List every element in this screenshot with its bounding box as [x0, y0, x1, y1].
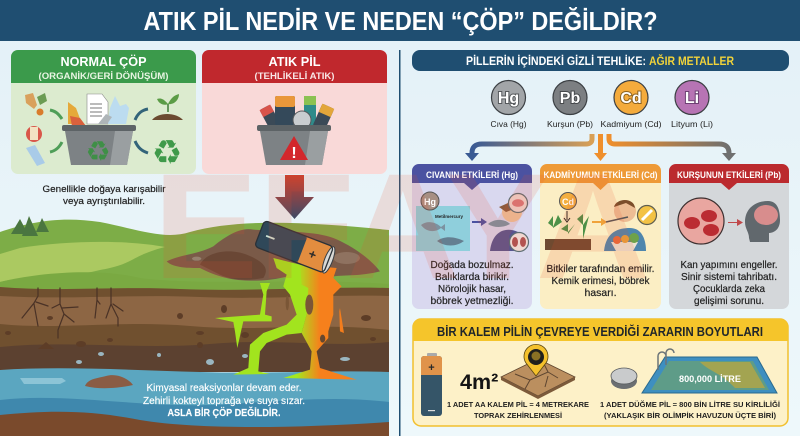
river bed	[0, 412, 389, 436]
caption: soil poisoning	[447, 400, 589, 420]
panel: waste battery	[202, 50, 387, 174]
green stream	[233, 258, 308, 375]
heading: cadmium: KADMİYUMUN ETKİLERİ (Cd)	[544, 170, 658, 181]
illustration: mercury in fish to human: Metilmercury	[435, 214, 464, 219]
banner: hidden danger: AĞIR METALLER	[649, 53, 734, 68]
element: cadmium: Kadmiyum (Cd)	[600, 119, 662, 129]
element: cadmium: Cd	[620, 90, 642, 107]
element: mercury	[490, 80, 527, 129]
panel: lead effects	[669, 164, 789, 309]
text: lead: Çocuklarda zeka	[693, 283, 765, 295]
side drip	[215, 283, 272, 348]
icon: skull pin	[524, 344, 548, 376]
trees	[11, 216, 49, 236]
title banner	[0, 0, 800, 41]
scene caption: Kimyasal reaksiyonlar devam eder.	[146, 383, 302, 394]
heading: damage scale: BİR KALEM PİLİN ÇEVREYE VERDİĞİ ZARARIN BOYUTLARI	[437, 324, 763, 339]
icon: AA battery	[421, 353, 442, 416]
waste battery heading: ATIK PİL	[268, 54, 321, 69]
element: lead	[547, 80, 593, 129]
illustration: mercury in fish to human: Hg	[424, 197, 436, 207]
orange stream	[283, 265, 357, 380]
bin with warning sign	[257, 125, 331, 165]
icon: polluted pool	[642, 349, 777, 393]
text: lead	[680, 259, 778, 307]
toxic leak: green and orange	[215, 258, 357, 380]
waste items	[25, 93, 129, 166]
element: lithium: Lityum (Li)	[671, 119, 713, 129]
text: cadmium: hasarı.	[584, 287, 616, 299]
soil mound	[167, 229, 380, 281]
panel: normal waste	[11, 50, 196, 174]
caption: normal waste	[42, 184, 166, 207]
watermark: EFAYA	[153, 142, 650, 310]
heading: lead: KURŞUNUN ETKİLERİ (Pb)	[677, 170, 781, 181]
element: mercury: Hg	[498, 90, 519, 107]
leaking battery: +	[306, 246, 319, 263]
bin with recycle symbol: ♻	[85, 136, 111, 167]
scene caption: ASLA BİR ÇÖP DEĞİLDİR.	[168, 406, 281, 419]
icon: button cell	[611, 368, 637, 389]
element: mercury: Cıva (Hg)	[490, 119, 527, 129]
text: cadmium: Kemik erimesi, böbrek	[552, 275, 650, 287]
banner: hidden danger	[412, 50, 789, 71]
panel: cadmium effects	[540, 164, 661, 309]
icon: cracked soil tile	[501, 359, 575, 399]
orange drip	[339, 308, 344, 333]
illustration: cadmium in plants to human	[545, 192, 656, 251]
caption: water pollution: (YAKLAŞIK BİR OLİMPİK HAVUZUN ÜÇTE BİRİ)	[604, 411, 777, 420]
sprout on soil	[152, 94, 183, 120]
text: mercury: böbrek yetmezliği.	[430, 295, 514, 307]
scene caption	[143, 383, 305, 419]
text: cadmium	[546, 263, 654, 299]
text: mercury	[430, 259, 514, 307]
text: lead: Sinir sistemi tahribatı.	[681, 271, 777, 283]
hills	[0, 220, 389, 292]
panel: landscape cross-section	[0, 216, 389, 436]
illustration: cadmium in plants to human: Cd	[562, 197, 574, 207]
soil layers	[0, 287, 389, 372]
recycling symbol: ♻	[152, 134, 182, 172]
text: mercury: Balıklarda birikir.	[435, 271, 509, 283]
illustration: blood cells to brain	[678, 198, 780, 244]
flow arrows	[50, 110, 62, 152]
illustration: mercury in fish to human	[416, 192, 528, 252]
water	[0, 368, 389, 436]
element icons	[490, 80, 713, 129]
scene caption: Zehirli kokteyl toprağa ve suya sızar.	[143, 396, 305, 407]
panel: normal waste: (ORGANİK/GERİ DÖNÜŞÜM)	[38, 71, 168, 82]
element: lithium	[671, 80, 713, 129]
panel: mercury effects	[412, 164, 532, 309]
heading: mercury: CIVANIN ETKİLERİ (Hg)	[426, 170, 518, 181]
text: mercury: Doğada bozulmaz.	[430, 259, 514, 271]
caption: normal waste: veya ayrıştırılabilir.	[63, 196, 145, 207]
tree roots	[22, 288, 123, 338]
arrows: metals to effects	[465, 134, 736, 161]
caption: soil poisoning: 1 ADET AA KALEM PİL = 4 METREKARE	[447, 400, 589, 409]
icon: polluted pool: 800,000 LİTRE	[679, 374, 741, 385]
bin with recycle symbol	[62, 125, 136, 167]
caption: water pollution: 1 ADET DÜĞME PİL = 800 BİN LİTRE SU KİRLİLİĞİ	[600, 400, 780, 409]
banner: hidden danger: PİLLERİN İÇİNDEKİ GİZLİ TEHLİKE:	[466, 53, 646, 68]
icon: AA battery: +	[428, 362, 435, 374]
caption: soil poisoning: TOPRAK ZEHİRLENMESİ	[474, 411, 562, 420]
caption: normal waste: Genellikle doğaya karışabilir	[42, 184, 166, 195]
panel: waste battery: (TEHLİKELİ ATIK)	[254, 71, 334, 82]
text: lead: gelişimi sorunu.	[694, 295, 764, 307]
bin with warning sign: !	[291, 145, 297, 162]
river rocks	[85, 375, 133, 388]
element: lead: Pb	[560, 90, 580, 107]
element: cadmium	[600, 80, 662, 129]
normal waste heading: NORMAL ÇÖP	[60, 54, 147, 69]
arrow: battery to ground	[275, 175, 314, 219]
batteries	[260, 96, 334, 131]
panel: damage scale	[413, 319, 788, 426]
vertical divider	[399, 50, 400, 436]
leaking battery	[255, 220, 337, 274]
caption: water pollution	[600, 400, 780, 420]
element: lithium: Li	[685, 90, 699, 107]
scattered stones	[5, 305, 376, 349]
text: lead: Kan yapımını engeller.	[680, 259, 778, 271]
text: mercury: Nörolojik hasar,	[438, 283, 506, 295]
stat: four square metres: 4m²	[460, 370, 498, 394]
title banner: ATIK PİL NEDİR VE NEDEN “ÇÖP” DEĞİLDİR?	[144, 7, 658, 36]
element: lead: Kurşun (Pb)	[547, 119, 593, 129]
text: cadmium: Bitkiler tarafından emilir.	[546, 263, 654, 275]
